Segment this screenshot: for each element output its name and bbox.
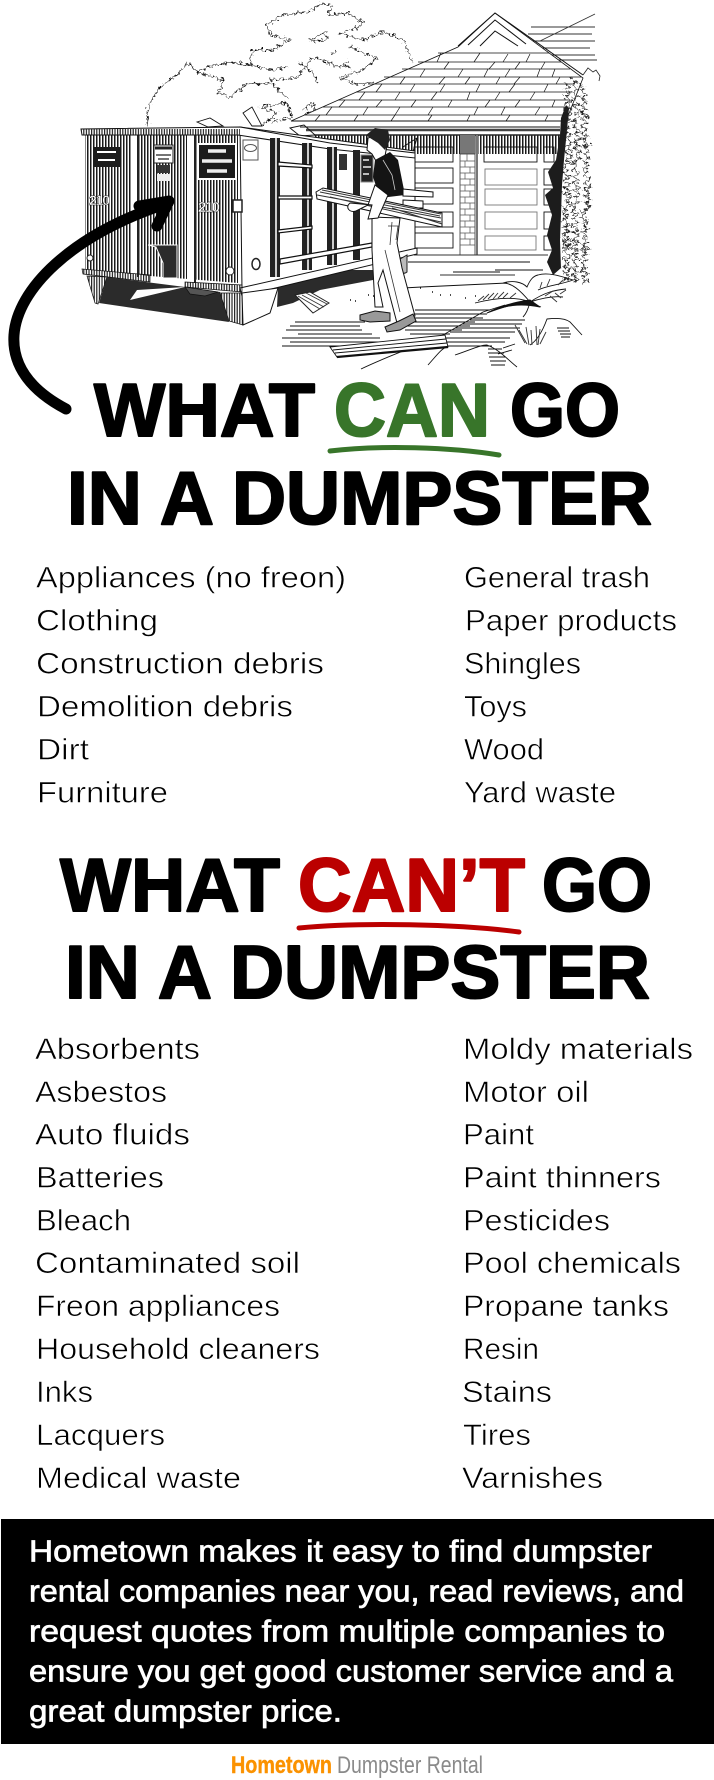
list: things that can go: Dirt (37, 734, 90, 766)
top rim (81, 127, 415, 158)
heading: what can go: GO (510, 368, 620, 452)
dumpster number 210, left: 210 (89, 192, 110, 208)
underline: green (330, 448, 499, 455)
list: things that can't go: Contaminated soil (35, 1247, 300, 1280)
second plank (403, 189, 433, 208)
list: things that can go: Appliances (no freon) (36, 561, 346, 594)
shoes (360, 311, 390, 322)
word: CAN'T in red: CAN’T (298, 843, 525, 927)
arrow: curved pointer to dumpster (14, 201, 169, 409)
list: things that can go: Furniture (37, 776, 168, 810)
list: things that can't go: Lacquers (36, 1419, 165, 1452)
callout panel: black box with copy: rental companies near you, read reviews, and (29, 1575, 684, 1609)
list: things that can go: General trash (464, 561, 650, 594)
climbing vine (545, 68, 600, 284)
list: things that can't go (35, 1033, 693, 1495)
callout panel: black box with copy: ensure you get good customer service and a (29, 1655, 673, 1689)
side posts and braces (270, 138, 360, 277)
shadow under dumpster (99, 270, 375, 322)
list: things that can't go: Auto fluids (35, 1118, 190, 1152)
arm and hand (348, 185, 388, 219)
list: things that can't go: Tires (463, 1419, 531, 1452)
legs (372, 217, 415, 323)
list: things that can't go: Asbestos (35, 1076, 167, 1109)
list: things that can't go: Paint thinners (463, 1162, 661, 1194)
list: things that can go: Yard waste (464, 776, 616, 810)
footer logo (231, 1752, 483, 1779)
list: things that can't go: Pesticides (463, 1204, 610, 1238)
illustration: dumpster, worker and house (81, 3, 600, 369)
hair (366, 128, 390, 150)
list: things that can't go: Bleach (36, 1204, 131, 1238)
list: things that can go: Shingles (464, 648, 581, 680)
plant in the yard (475, 274, 573, 345)
heading: what can't go: IN A DUMPSTER (65, 930, 650, 1014)
signs and stencils (93, 147, 120, 167)
garage front with doors and brick pillar (314, 135, 560, 255)
callout panel: black box with copy: Hometown makes it easy to find dumpster (29, 1535, 652, 1569)
list: things that can't go: Stains (462, 1376, 552, 1409)
callout panel: black box with copy: request quotes from multiple companies to (29, 1615, 665, 1649)
dumpster side panel (240, 127, 415, 290)
list: things that can't go: Medical waste (36, 1462, 241, 1495)
footer logo: Dumpster Rental (337, 1752, 483, 1779)
list: things that can't go: Propane tanks (463, 1290, 669, 1323)
callout panel: black box with copy: great dumpster price. (29, 1695, 342, 1729)
list: things that can't go: Paint (463, 1118, 535, 1152)
list: things that can't go: Motor oil (463, 1076, 589, 1109)
handles and drain circles (233, 200, 242, 212)
fallen board (295, 292, 329, 313)
list: things that can go: Paper products (465, 604, 677, 638)
list: things that can't go: Freon appliances (36, 1290, 280, 1323)
white gap under dumpster (130, 287, 185, 300)
heading: what can't go: WHAT (60, 843, 280, 927)
list: things that can't go: Resin (463, 1333, 539, 1366)
dumpster number 210, right: 210 (198, 199, 220, 216)
list: things that can go (36, 561, 677, 810)
word: CAN in green: CAN (334, 368, 490, 452)
list: things that can't go: Household cleaners (36, 1333, 320, 1366)
torso (373, 152, 405, 198)
list: things that can go: Demolition debris (37, 690, 293, 724)
pontoons (87, 276, 107, 304)
corrugated end panel (85, 135, 238, 283)
heading: what can't go (60, 843, 652, 1014)
heading: what can go: WHAT (94, 368, 315, 452)
list: things that can't go: Absorbents (35, 1033, 200, 1066)
end panel posts (132, 135, 194, 282)
callout panel: black box with copy (1, 1519, 714, 1744)
list: things that can't go: Varnishes (462, 1462, 603, 1495)
face (367, 135, 388, 161)
list: things that can't go: Inks (36, 1376, 93, 1409)
sign on far side (339, 154, 347, 170)
ground lines and mounds (282, 262, 582, 369)
worker carrying lumber (316, 128, 442, 332)
list: things that can go: Construction debris (36, 648, 324, 680)
hatch on dumpster (148, 245, 177, 278)
house roof (291, 13, 597, 130)
footer logo: Hometown (231, 1752, 332, 1779)
list: things that can't go: Batteries (36, 1162, 164, 1194)
heading: what can go: IN A DUMPSTER (67, 456, 652, 540)
lumber stack (316, 188, 442, 227)
list: things that can't go: Moldy materials (463, 1033, 693, 1066)
dumpster (81, 127, 417, 325)
list: things that can go: Clothing (36, 604, 158, 638)
list: things that can go: Wood (464, 734, 544, 766)
lower rails (82, 269, 150, 282)
lumber sticking out of the dumpster (197, 107, 417, 155)
underline: red (299, 925, 519, 932)
list: things that can't go: Pool chemicals (463, 1247, 681, 1280)
list: things that can go: Toys (464, 690, 527, 724)
heading: what can't go: GO (542, 843, 652, 927)
heading: what can go (67, 368, 652, 540)
trees behind the house (147, 3, 413, 125)
